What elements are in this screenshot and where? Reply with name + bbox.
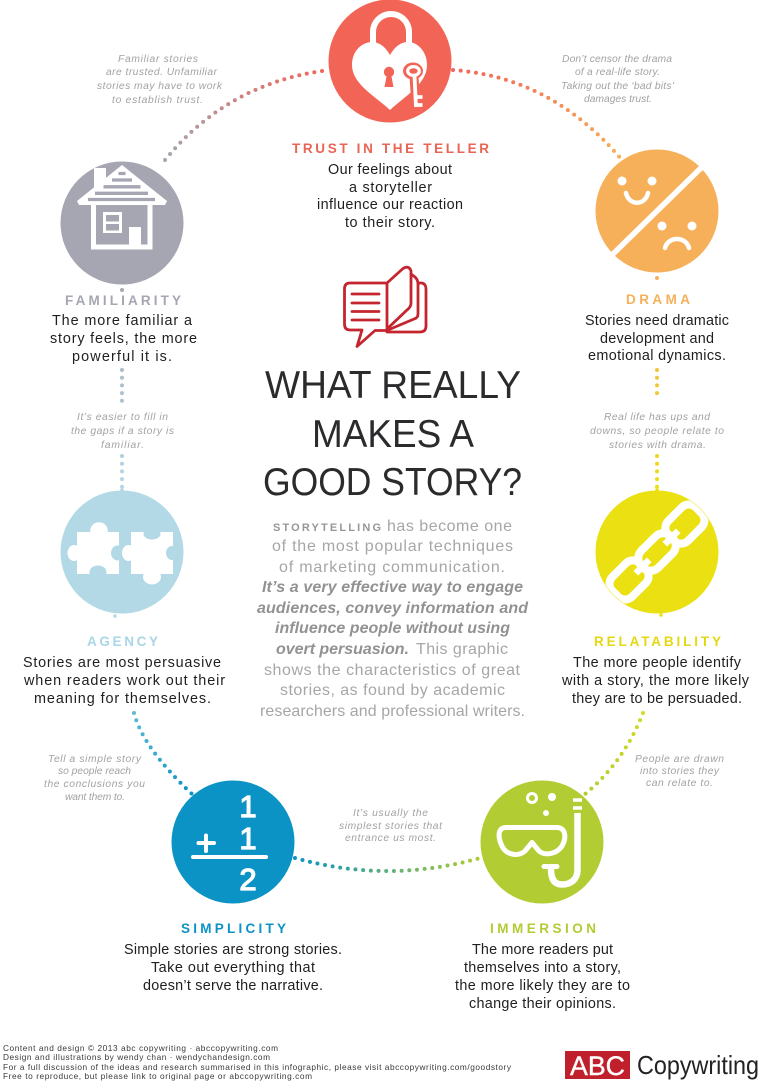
panel: familiarity — [50, 162, 197, 451]
intro paragraph: researchers and professional writers. — [260, 703, 525, 720]
intro paragraph: It’s a very effective way to engage — [262, 579, 523, 596]
icon: chain links — [596, 488, 718, 617]
intro paragraph: of the most popular techniques — [272, 538, 513, 555]
caption: the gaps if a story is — [71, 426, 174, 437]
footer credits: Content and design © 2013 abc copywriting · abccopywriting.com — [3, 1043, 278, 1053]
caption: real-life drama: Don’t censor the drama — [562, 54, 672, 65]
heading: FAMILIARITY — [65, 293, 181, 308]
text block — [585, 313, 729, 364]
title: WHAT REALLY — [265, 364, 521, 407]
text block: Simple stories are strong stories. — [124, 942, 342, 958]
intro paragraph: influence people without using — [275, 620, 510, 637]
intro paragraph — [257, 518, 529, 720]
caption: drawn into stories: People are drawn — [635, 754, 724, 765]
title: MAKES A — [312, 413, 474, 456]
caption: familiar stories: stories may have to work — [97, 81, 223, 92]
panel: trust in the teller — [292, 0, 489, 231]
footer credits: Design and illustrations by wendy chan · wendychandesign.com — [3, 1052, 270, 1062]
dotted line: familiarity to agency — [120, 290, 124, 490]
caption: familiar stories: to establish trust. — [112, 95, 203, 106]
caption — [590, 412, 724, 451]
text block: Stories are most persuasive — [23, 655, 221, 671]
dotted arc: trust to drama — [453, 70, 622, 160]
text block: the more likely they are to — [455, 978, 630, 994]
text block — [50, 313, 197, 365]
title — [263, 364, 522, 504]
intro paragraph: shows the characteristics of great — [264, 662, 521, 679]
text block: influence our reaction — [317, 197, 463, 213]
icon: addition sum: 2 — [239, 862, 257, 897]
text block: emotional dynamics. — [588, 348, 726, 364]
caption: simple story — [44, 754, 145, 803]
heading: AGENCY — [87, 634, 158, 649]
icon: addition sum: 1 — [239, 789, 257, 824]
text block: to their story. — [345, 215, 435, 231]
icon: heart padlock and key — [328, 0, 452, 122]
dotted arc: agency to simplicity — [134, 713, 192, 794]
caption: familiar stories: are trusted. Unfamiliar — [106, 67, 218, 78]
dotted arc: simplicity to immersion — [295, 858, 480, 871]
caption: drawn into stories: can relate to. — [646, 778, 713, 789]
caption: real-life drama: damages trust. — [584, 94, 652, 105]
text block: The more familiar a — [52, 313, 192, 329]
intro paragraph: has become one — [387, 518, 512, 535]
caption: drawn into stories: into stories they — [640, 766, 720, 777]
intro paragraph: of marketing communication. — [279, 559, 505, 576]
caption: simplest stories: entrance us most. — [345, 833, 436, 844]
icon: happy and sad faces — [596, 150, 718, 272]
dotted arc: relatability to immersion — [584, 713, 643, 795]
caption: real-life drama: of a real-life story. — [575, 67, 660, 78]
caption: real-life drama: Taking out the ‘bad bits’ — [561, 81, 675, 92]
footer credits — [3, 1043, 512, 1081]
title: GOOD STORY? — [263, 461, 522, 504]
heading: SIMPLICITY — [181, 921, 286, 936]
text block: Stories need dramatic — [585, 313, 729, 329]
text block: change their opinions. — [469, 996, 616, 1012]
caption: real-life drama — [561, 54, 675, 105]
caption: simple story: the conclusions you — [44, 779, 145, 790]
text block — [455, 942, 630, 1012]
caption: simple story: so people reach — [58, 766, 131, 777]
caption: familiar stories: Familiar stories — [118, 54, 198, 65]
heading: TRUST IN THE TELLER — [292, 141, 489, 156]
text block: a storyteller — [349, 180, 432, 196]
logo: ABC Copywriting: ABC — [570, 1051, 625, 1081]
intro paragraph: This graphic — [416, 641, 508, 658]
heading: IMMERSION — [490, 921, 596, 936]
dotted line: drama to relatability — [655, 278, 659, 490]
footer credits: Free to reproduce, but please link to original page or abccopywriting.com — [3, 1071, 312, 1081]
text block: they are to be persuaded. — [572, 691, 742, 707]
intro paragraph: audiences, convey information and — [257, 600, 529, 617]
caption: familiar stories — [97, 54, 223, 106]
heading: DRAMA — [626, 292, 690, 307]
caption — [71, 412, 174, 451]
panel: agency — [23, 488, 225, 707]
heading: RELATABILITY — [594, 634, 721, 649]
intro paragraph: STORYTELLING — [273, 522, 381, 534]
text block: The more readers put — [472, 942, 613, 958]
footer credits: For a full discussion of the ideas and research summarised in this infographic, please visit abccopywriting.com/goodstory — [3, 1062, 512, 1072]
caption: simple story: Tell a simple story — [48, 754, 142, 765]
text block: story feels, the more — [50, 331, 197, 347]
text block — [561, 655, 750, 707]
caption: simple story: want them to. — [65, 792, 125, 803]
caption: downs, so people relate to — [590, 426, 724, 437]
icon: house — [60, 162, 184, 284]
caption: simplest stories: It’s usually the — [353, 808, 428, 819]
text block — [317, 162, 463, 231]
panel: relatability — [561, 488, 750, 707]
caption: drawn into stories — [635, 754, 724, 789]
icon: addition sum: 1 — [239, 821, 257, 856]
text block: development and — [600, 331, 714, 347]
text block: Take out everything that — [151, 960, 315, 976]
text block: when readers work out their — [23, 673, 225, 689]
text block: meaning for themselves. — [34, 691, 211, 707]
intro paragraph: stories, as found by academic — [280, 682, 505, 699]
text block: doesn’t serve the narrative. — [143, 978, 323, 994]
logo: ABC Copywriting — [565, 1050, 759, 1081]
intro paragraph: overt persuasion. — [276, 641, 409, 658]
icon: snorkel mask — [480, 780, 604, 904]
caption: Real life has ups and — [604, 412, 710, 423]
panel: drama — [585, 150, 729, 451]
icon: book with speech bubble — [344, 267, 426, 346]
panel: simplicity — [124, 780, 342, 994]
text block: The more people identify — [573, 655, 742, 671]
caption: simplest stories — [339, 808, 443, 844]
text block: Our feelings about — [328, 162, 452, 178]
text block: powerful it is. — [72, 349, 172, 365]
text block: themselves into a story, — [464, 960, 621, 976]
caption: It’s easier to fill in — [77, 412, 168, 423]
caption: familiar. — [101, 440, 144, 451]
text block — [23, 655, 225, 707]
text block: with a story, the more likely — [561, 673, 750, 689]
dotted arc: trust to familiarity — [165, 71, 322, 160]
text block — [124, 942, 342, 994]
caption: stories with drama. — [609, 440, 706, 451]
icon: puzzle pieces — [60, 488, 184, 618]
caption: simplest stories: simplest stories that — [339, 821, 443, 832]
panel: immersion — [455, 780, 630, 1012]
icon: addition sum — [172, 780, 294, 904]
